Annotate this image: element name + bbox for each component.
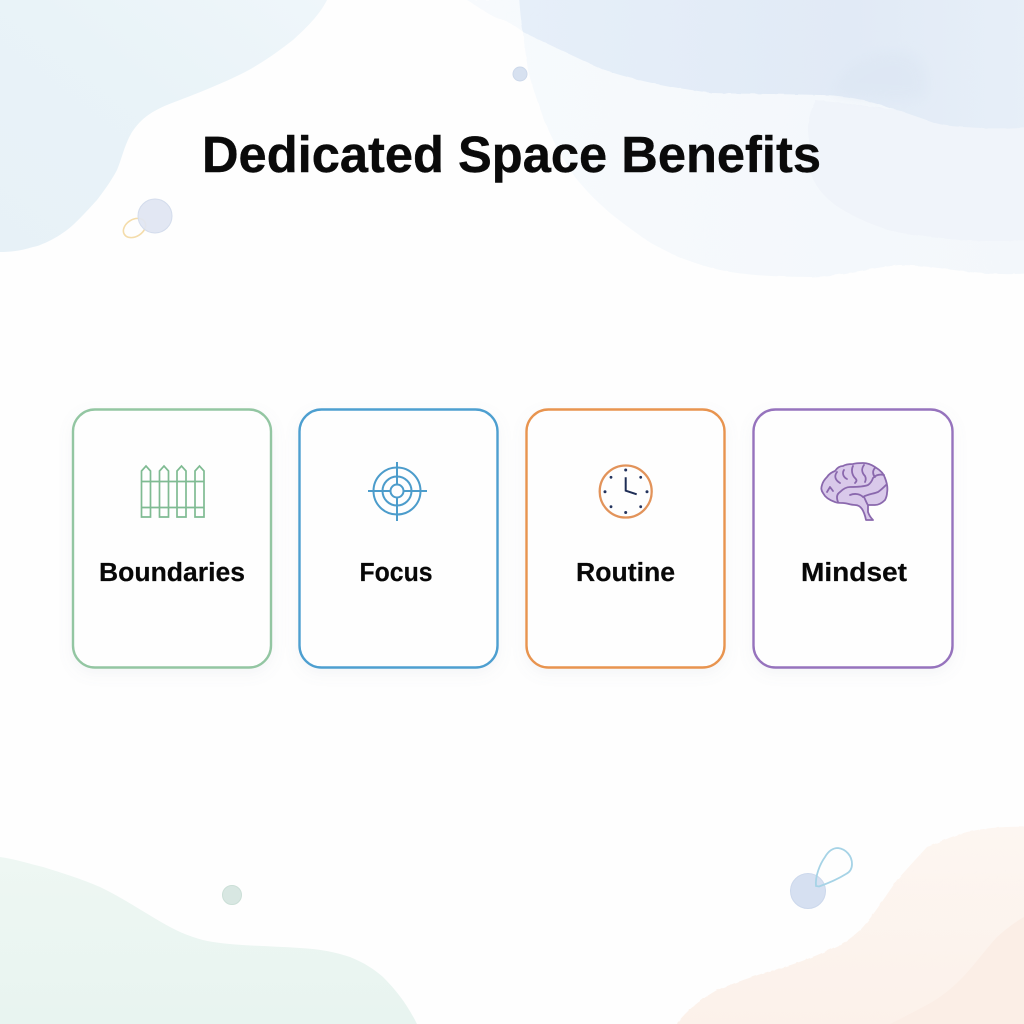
background blob: top left blue <box>0 0 327 252</box>
icon: clock <box>600 466 652 518</box>
decorative dot: bottom left <box>222 886 242 904</box>
label: Mindset: Mindset <box>801 559 908 587</box>
icon: target <box>368 462 427 521</box>
background blob: top right light blue <box>467 0 1024 277</box>
icon: brain <box>821 463 887 520</box>
card: Mindset <box>754 410 952 668</box>
card: Routine <box>526 410 724 668</box>
decorative bubble: top left <box>120 199 172 242</box>
label: Focus: Focus <box>360 559 432 587</box>
card: Boundaries <box>73 410 271 668</box>
icon: fence <box>142 466 204 517</box>
title: Dedicated Space Benefits <box>202 126 821 183</box>
card: Focus <box>300 410 498 668</box>
decorative bubble: bottom right <box>790 848 852 908</box>
background blob: bottom left green <box>0 857 417 1024</box>
label: Routine: Routine <box>576 559 675 587</box>
background blob: bottom right peach <box>672 827 1024 1024</box>
decorative dot: top <box>513 67 527 81</box>
label: Boundaries: Boundaries <box>99 559 245 587</box>
